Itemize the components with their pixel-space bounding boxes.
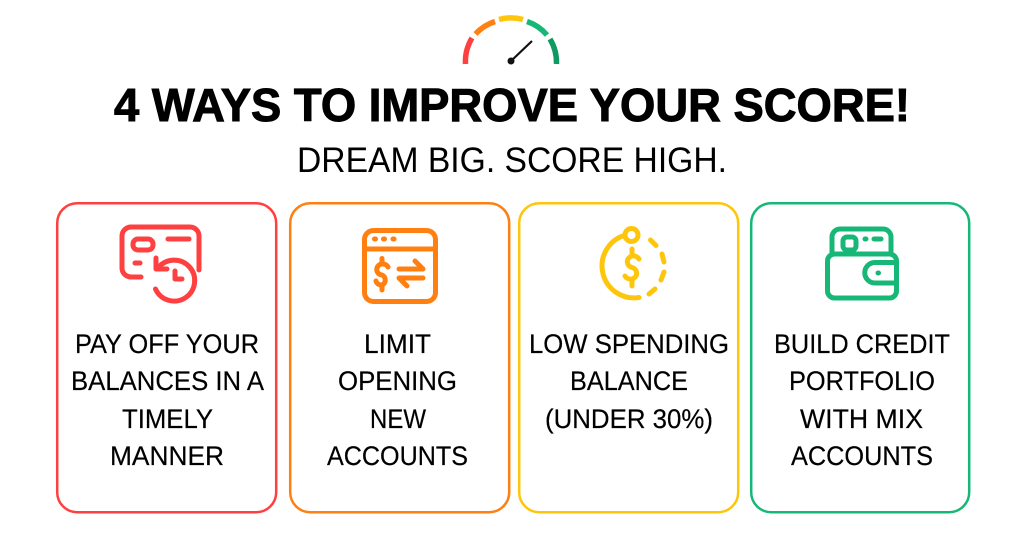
text: low spending balance: (UNDER 30%) (545, 404, 713, 434)
text: build credit portfolio: PORTFOLIO (789, 366, 935, 396)
text: low spending balance: LOW SPENDING (529, 329, 729, 359)
subtitle: DREAM BIG. SCORE HIGH. (297, 141, 727, 180)
text: pay off your balances (71, 329, 264, 471)
panel: build credit portfolio (751, 203, 969, 512)
text: build credit portfolio: WITH MIX (800, 404, 923, 434)
icon: dollar circular progress (602, 228, 664, 298)
text: limit opening new accounts: ACCOUNTS (327, 441, 468, 471)
text: build credit portfolio: BUILD CREDIT (774, 329, 950, 359)
icon: credit score gauge (465, 18, 557, 64)
panel: pay off balances (57, 203, 276, 512)
icon: card with clock (122, 227, 199, 301)
icon: wallet with card (828, 229, 896, 298)
text: low spending balance: BALANCE (570, 366, 688, 396)
icon: browser with dollar exchange (364, 230, 436, 302)
title: 4 WAYS TO IMPROVE YOUR SCORE! (114, 79, 910, 131)
text: pay off your balances: MANNER (110, 441, 224, 471)
text: limit opening new accounts: NEW (370, 404, 426, 434)
text: build credit portfolio (774, 329, 950, 471)
text: limit opening new accounts: OPENING (338, 366, 457, 396)
text: build credit portfolio: ACCOUNTS (791, 441, 933, 471)
text: pay off your balances: BALANCES IN A (71, 366, 264, 396)
text: limit opening new accounts (327, 329, 468, 471)
text: pay off your balances: PAY OFF YOUR (75, 329, 259, 359)
text: pay off your balances: TIMELY (122, 404, 213, 434)
panel: limit new accounts (290, 203, 509, 512)
text: limit opening new accounts: LIMIT (364, 329, 431, 359)
panel: low spending balance (519, 203, 738, 512)
text: low spending balance (529, 329, 729, 434)
